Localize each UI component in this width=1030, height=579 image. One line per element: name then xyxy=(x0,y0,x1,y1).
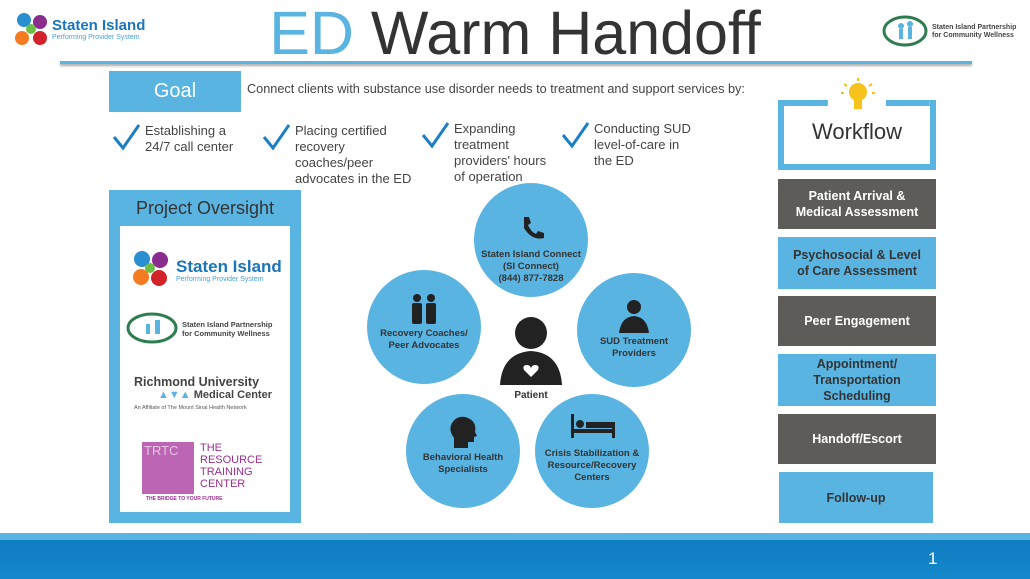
checklist: Expanding xyxy=(454,121,515,136)
circle: crisis stabilization: Resource/Recovery xyxy=(548,460,636,471)
logo: SIPCW xyxy=(882,16,1016,46)
logo: Staten Island PPS: Staten Island xyxy=(52,17,145,34)
icon: patient: Patient xyxy=(514,390,548,401)
panel: project oversight: Project Oversight xyxy=(136,198,274,218)
logo: RUMC: An Affiliate of The Mount Sinai Health Network xyxy=(134,405,247,411)
title underline xyxy=(60,61,972,64)
workflow steps: of Care Assessment xyxy=(797,264,917,278)
circle: crisis stabilization: Crisis Stabilization & xyxy=(545,448,639,459)
workflow steps: Psychosocial & Level xyxy=(793,248,921,262)
icon: patient xyxy=(500,317,562,401)
workflow steps: Peer Engagement xyxy=(804,314,910,328)
circle: behavioral health: Behavioral Health xyxy=(423,452,503,463)
circle: SUD treatment xyxy=(577,273,691,387)
goal box: Goal xyxy=(154,80,196,102)
workflow steps: Handoff/Escort xyxy=(812,432,902,446)
circle: behavioral health xyxy=(406,394,520,508)
circle: SI Connect: Staten Island Connect xyxy=(481,249,581,260)
workflow steps: Appointment/ xyxy=(817,357,897,371)
logo: SIPCW: for Community Wellness xyxy=(932,32,1014,39)
logo: staten island xyxy=(133,251,282,286)
workflow steps: Transportation xyxy=(813,373,901,387)
checklist: 24/7 call center xyxy=(145,139,233,154)
logo: TRTC xyxy=(142,442,262,502)
circle: SI Connect: (SI Connect) xyxy=(503,261,559,272)
workflow heading xyxy=(778,100,936,170)
logo: Staten Island PPS: Performing Provider System xyxy=(52,34,140,41)
checklist: Establishing a xyxy=(145,123,226,138)
circle: SI Connect: (844) 877-7828 xyxy=(499,273,563,284)
workflow steps: Patient Arrival & xyxy=(809,189,905,203)
checklist: treatment xyxy=(454,137,509,152)
logo: RUMC: Richmond University xyxy=(134,375,259,389)
logo: SIPCW xyxy=(126,312,272,344)
checklist: level-of-care in xyxy=(594,137,679,152)
circle: SUD treatment: Providers xyxy=(612,348,656,359)
circle: recovery coaches: Recovery Coaches/ xyxy=(380,328,468,339)
logo: SIPCW: Staten Island Partnership xyxy=(932,24,1016,31)
logo: SIPCW: Staten Island Partnership xyxy=(182,320,272,329)
workflow steps: Follow-up xyxy=(826,490,886,504)
logo: staten island: Staten Island xyxy=(176,257,282,276)
logo: staten island: Performing Provider System xyxy=(176,276,264,283)
circle: crisis stabilization xyxy=(535,394,649,508)
checklist: the ED xyxy=(594,153,634,168)
goal text: Connect clients with substance use disorder needs to treatment and support services by: xyxy=(247,82,745,96)
logo: TRTC: RESOURCE xyxy=(200,454,262,466)
workflow steps xyxy=(778,179,936,523)
checklist xyxy=(112,121,691,186)
workflow steps: Medical Assessment xyxy=(796,205,918,219)
circle: recovery coaches xyxy=(367,270,481,384)
workflow steps: Scheduling xyxy=(823,389,891,403)
checklist: advocates in the ED xyxy=(295,171,411,186)
circle: recovery coaches: Peer Advocates xyxy=(389,340,459,351)
logo: TRTC: TRAINING xyxy=(200,466,253,478)
footer bar: 1 xyxy=(928,549,937,568)
checklist: coaches/peer xyxy=(295,155,373,170)
panel: project oversight xyxy=(109,190,301,523)
icon: lightbulb xyxy=(841,78,875,109)
checklist: providers' hours xyxy=(454,153,546,168)
circle: crisis stabilization: Centers xyxy=(574,472,610,483)
title: ED Warm Handoff xyxy=(269,0,761,67)
circle: SI Connect xyxy=(474,183,588,297)
circle: SUD treatment: SUD Treatment xyxy=(600,336,668,347)
checklist: recovery xyxy=(295,139,345,154)
checklist: of operation xyxy=(454,169,523,184)
checklist: Placing certified xyxy=(295,123,387,138)
logo: TRTC: THE BRIDGE TO YOUR FUTURE xyxy=(146,496,222,502)
logo: TRTC: THE xyxy=(200,442,222,454)
circle: behavioral health: Specialists xyxy=(438,464,488,475)
logo: TRTC: CENTER xyxy=(200,478,245,490)
goal box xyxy=(109,71,241,112)
logo: SIPCW: for Community Wellness xyxy=(182,329,270,338)
footer bar xyxy=(0,533,1030,579)
logo: TRTC: TRTC xyxy=(144,443,178,458)
workflow heading: Workflow xyxy=(812,119,902,144)
logo: RUMC: ▲▼▲ Medical Center xyxy=(158,389,272,401)
checklist: Conducting SUD xyxy=(594,121,691,136)
logo: Staten Island PPS xyxy=(15,13,145,45)
logo: RUMC xyxy=(134,375,272,411)
